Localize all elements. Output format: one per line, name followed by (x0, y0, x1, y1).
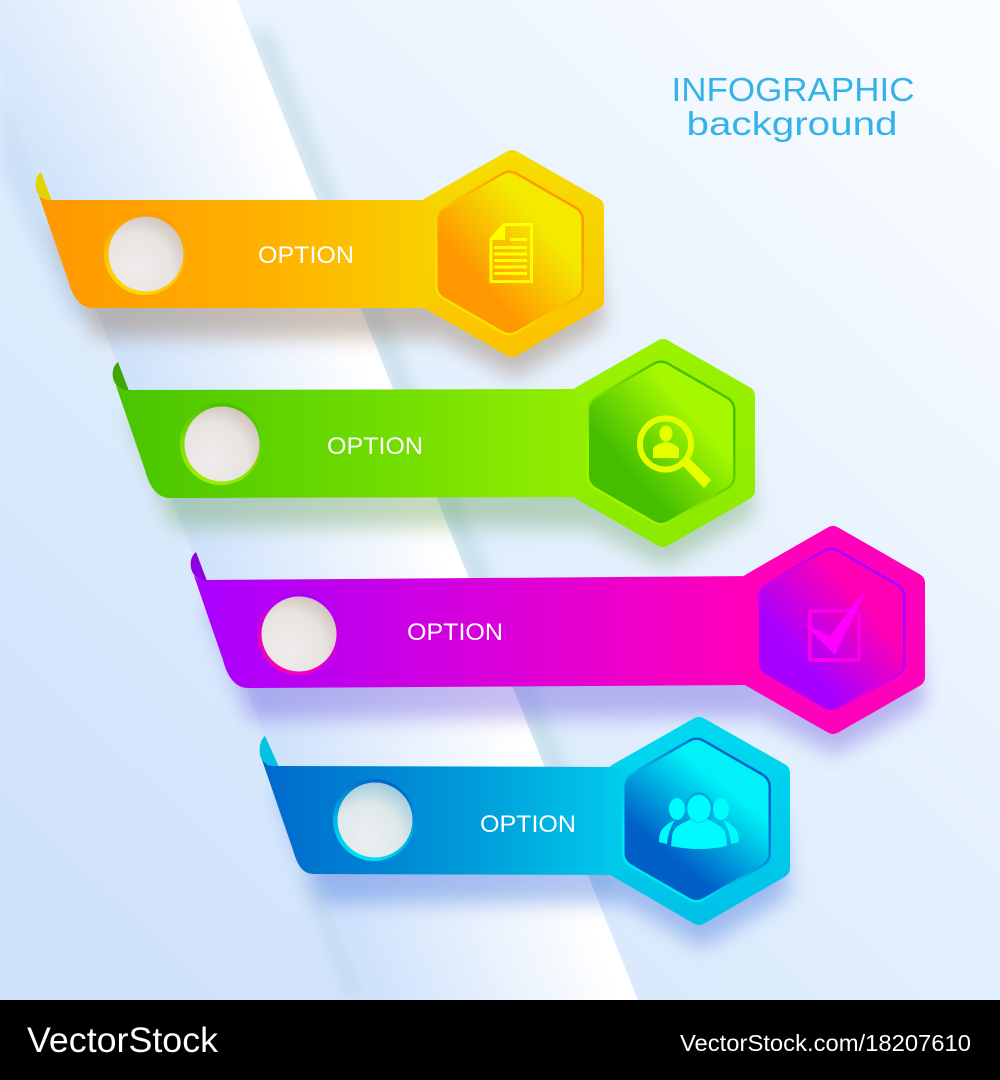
ribbon body (113, 377, 590, 498)
option 1: orange ribbon (36, 160, 605, 378)
title (672, 71, 914, 142)
diagonal white strip (0, 0, 638, 1000)
icon: document (490, 224, 532, 282)
label: OPTION (258, 242, 354, 269)
hexagon (618, 727, 780, 915)
option 3: purple ribbon (191, 536, 925, 755)
hole (257, 593, 339, 675)
hole (333, 779, 415, 861)
ribbon body (36, 187, 440, 308)
ribbon fold (260, 736, 279, 767)
hexagon (751, 536, 915, 724)
hexagon (430, 160, 594, 347)
icon: group of people (659, 794, 739, 849)
label: OPTION (327, 433, 423, 460)
icon: magnifier with person (640, 418, 710, 487)
footer logo: VectorStock (27, 1021, 219, 1060)
ribbon fold (113, 362, 129, 391)
hexagon (581, 349, 745, 537)
label: OPTION (480, 811, 576, 838)
option 4: blue ribbon (260, 727, 790, 948)
footer bar (0, 1000, 1000, 1080)
hole (180, 403, 262, 485)
ribbon body (260, 754, 625, 875)
inner hexagon (638, 753, 756, 887)
ribbon fold (191, 552, 207, 581)
ribbon fold (36, 172, 52, 201)
inner hexagon (602, 376, 720, 510)
option 2: green ribbon (113, 349, 755, 568)
ribbon body (191, 567, 760, 688)
footer url: VectorStock.com/18207610 (680, 1030, 971, 1056)
label: OPTION (407, 619, 503, 646)
hole (104, 213, 186, 295)
title: INFOGRAPHIC (672, 71, 914, 108)
title: background (686, 105, 898, 142)
inner hexagon (772, 563, 890, 697)
inner hexagon (450, 186, 568, 320)
icon: checkbox (803, 585, 869, 660)
